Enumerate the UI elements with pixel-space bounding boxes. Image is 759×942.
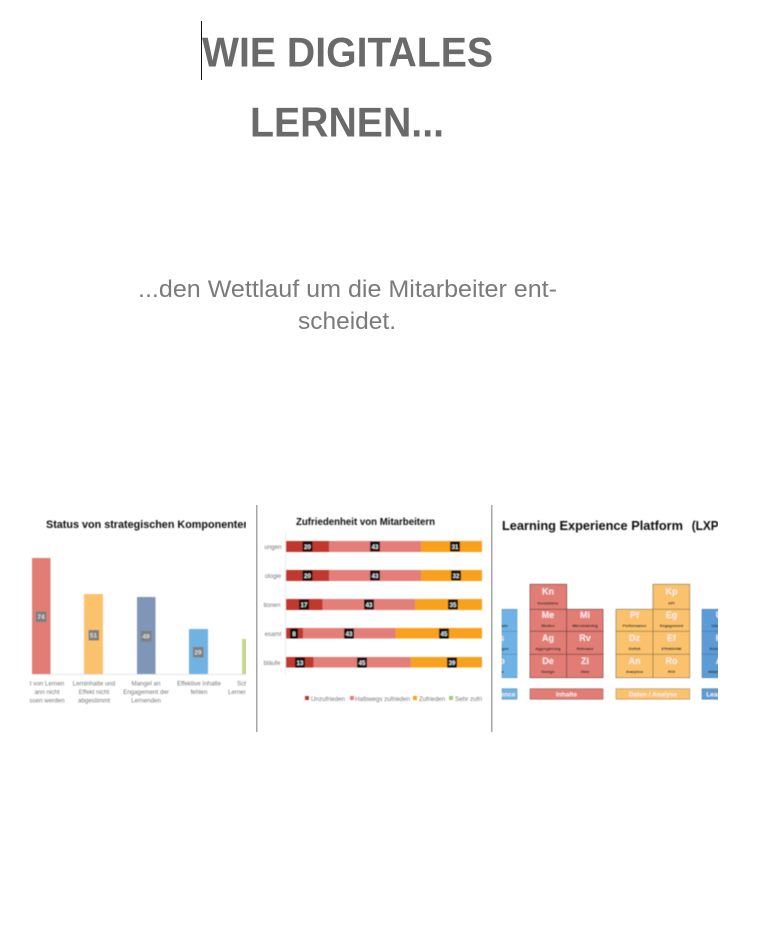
row 4: 45 xyxy=(441,632,448,638)
right blue column: Abschluss xyxy=(708,669,728,674)
row 3: 43 xyxy=(366,603,373,609)
category label 3: Mangel an xyxy=(132,680,161,688)
row 2: 20 xyxy=(304,574,311,580)
title xyxy=(202,28,493,146)
chart title: Learning Experience Platform xyxy=(502,519,683,533)
data cell labels: Defizit xyxy=(629,646,641,651)
data cell labels: Eg xyxy=(666,610,677,620)
data cell labels: Kp xyxy=(666,586,678,596)
right blue column: A xyxy=(716,656,723,666)
right blue column: User xyxy=(712,623,721,628)
category label 4: Effektive Inhalte xyxy=(177,680,222,688)
row 3: tionen xyxy=(264,602,281,609)
content cell labels: Me xyxy=(542,610,554,620)
left blue column: Fs xyxy=(494,633,504,643)
data cell labels: Effektivität xyxy=(662,646,682,651)
data cell labels: Engagement xyxy=(660,623,684,628)
bar 51 xyxy=(84,594,103,674)
panel: bar chart strategic components xyxy=(29,519,250,704)
content cell labels: Microlearning xyxy=(572,623,598,628)
legend: Unzufrieden xyxy=(311,696,345,703)
category label 2: Lerninhalte und xyxy=(73,680,116,688)
bar 29 xyxy=(189,629,208,674)
legend: inhalte: Inhalte xyxy=(556,691,577,698)
category label 2 xyxy=(73,680,116,704)
row 2: ologie xyxy=(265,573,282,580)
data cell labels: Pf xyxy=(630,610,640,620)
bar clipped xyxy=(242,639,247,674)
content cell labels: Kn xyxy=(542,586,554,596)
divider left xyxy=(256,505,258,732)
divider right xyxy=(491,505,492,732)
content cell labels: Mi xyxy=(580,610,590,620)
bar 74 xyxy=(32,558,50,674)
legend: learning xyxy=(700,688,718,700)
row 5: 39 xyxy=(449,661,456,667)
title: LERNEN... xyxy=(250,98,444,146)
category label 4: fehlen xyxy=(191,689,208,696)
legend: experience xyxy=(502,688,518,700)
data cell labels xyxy=(623,586,684,674)
axis xyxy=(284,532,287,675)
right blue column: Kommun xyxy=(710,646,727,651)
category label 1: t von Lernen xyxy=(30,680,65,688)
legend xyxy=(305,696,482,703)
row 4: esamt xyxy=(265,631,282,638)
left blue column xyxy=(502,608,518,679)
left blue column: Kurse xyxy=(493,669,505,674)
category label 1 xyxy=(29,680,65,704)
right blue column: K xyxy=(716,633,723,643)
category label 1: ann nicht xyxy=(34,689,60,696)
content cell labels: Zi xyxy=(581,656,589,666)
legend: Zufrieden xyxy=(419,696,445,703)
category label 5: Sch xyxy=(237,680,248,688)
bar 49 xyxy=(137,597,156,674)
category label 1: ssen werden xyxy=(29,698,65,704)
chart title: Zufriedenheit von Mitarbeitern xyxy=(296,517,435,528)
content cell labels: Relevanz xyxy=(577,646,593,651)
row 1: ungen xyxy=(264,544,282,551)
content cell labels: Design xyxy=(542,669,555,674)
category label 3: Lernenden xyxy=(131,698,161,704)
row 3: 35 xyxy=(450,603,457,609)
left blue column: Lernwegen xyxy=(488,646,509,651)
bar 74: 74 xyxy=(37,614,45,621)
row 1: 31 xyxy=(452,545,459,551)
data cell labels: Ro xyxy=(666,656,678,666)
category label 4 xyxy=(177,680,222,696)
subtitle: ...den Wettlauf um die Mitarbeiter ent- xyxy=(138,276,557,303)
row 2: 32 xyxy=(453,574,460,580)
legend: daten / analyse: Daten / Analyse xyxy=(629,691,677,698)
data column group xyxy=(616,584,690,678)
data cell labels: ROI xyxy=(668,669,675,674)
subtitle: scheidet. xyxy=(298,308,396,335)
row 2 xyxy=(265,570,482,581)
panel: stacked bar chart employee satisfaction xyxy=(264,517,482,703)
category label 3 xyxy=(123,680,169,704)
legend: Halbwegs zufrieden xyxy=(355,696,410,703)
right blue column xyxy=(700,608,718,679)
bar 29: 29 xyxy=(194,650,202,656)
legend: Sehr zufri xyxy=(455,696,482,703)
legend: learning: Learning xyxy=(706,691,734,698)
left blue column: Lernpfade xyxy=(489,623,509,628)
category label 3: Engagement der xyxy=(123,689,169,696)
content cell labels: Ziele xyxy=(581,669,590,674)
content column group xyxy=(530,584,603,678)
data cell labels: KPI xyxy=(668,601,675,606)
row 5: bläufe xyxy=(264,660,281,667)
legend: inhalte xyxy=(530,689,603,699)
category label 5: Lerner xyxy=(228,689,246,696)
row 4: 43 xyxy=(346,632,353,638)
content cell labels: Rv xyxy=(579,633,591,643)
row 4: 8 xyxy=(292,632,296,638)
axis line xyxy=(32,674,246,675)
text cursor xyxy=(201,21,202,80)
chart title: (LXP xyxy=(692,519,719,533)
content cell labels: De xyxy=(542,656,554,666)
row 3: 17 xyxy=(301,603,308,609)
row 2: 43 xyxy=(372,574,379,580)
row 5: 13 xyxy=(297,661,304,667)
content cell labels: Konsistenz xyxy=(538,601,558,606)
content cell labels: Aggregierung xyxy=(535,646,561,651)
legend: daten / analyse xyxy=(616,689,690,699)
content cell labels xyxy=(535,586,598,674)
row 3 xyxy=(264,599,482,610)
content cell labels: Medien xyxy=(541,623,555,628)
row 4 xyxy=(265,628,482,638)
title: WIE DIGITALES xyxy=(202,28,493,76)
row 1: 43 xyxy=(372,545,379,551)
data cell labels: Performance xyxy=(623,623,647,628)
data cell labels: Analytics xyxy=(626,669,643,674)
category label 5 xyxy=(228,680,246,695)
data cell labels: Dz xyxy=(629,633,640,643)
row 5: 45 xyxy=(359,661,366,667)
data cell labels: Ef xyxy=(667,633,677,643)
subtitle xyxy=(138,276,557,335)
legend: experience: Experience xyxy=(481,691,516,698)
row 1 xyxy=(264,541,482,552)
left blue column: Po xyxy=(493,656,505,666)
bar 51: 51 xyxy=(90,632,97,640)
chart title: Status von strategischen Komponenten xyxy=(46,519,250,531)
right blue column: U xyxy=(716,610,722,620)
data cell labels: An xyxy=(628,656,640,666)
content cell labels: Ag xyxy=(542,633,554,643)
panel: learning experience platform table xyxy=(502,520,718,700)
category label 2: Effekt nicht xyxy=(79,689,110,696)
category label 2: abgestimmt xyxy=(78,698,110,704)
row 5 xyxy=(264,657,482,668)
row 1: 20 xyxy=(304,545,311,551)
bar 49: 49 xyxy=(142,634,150,640)
